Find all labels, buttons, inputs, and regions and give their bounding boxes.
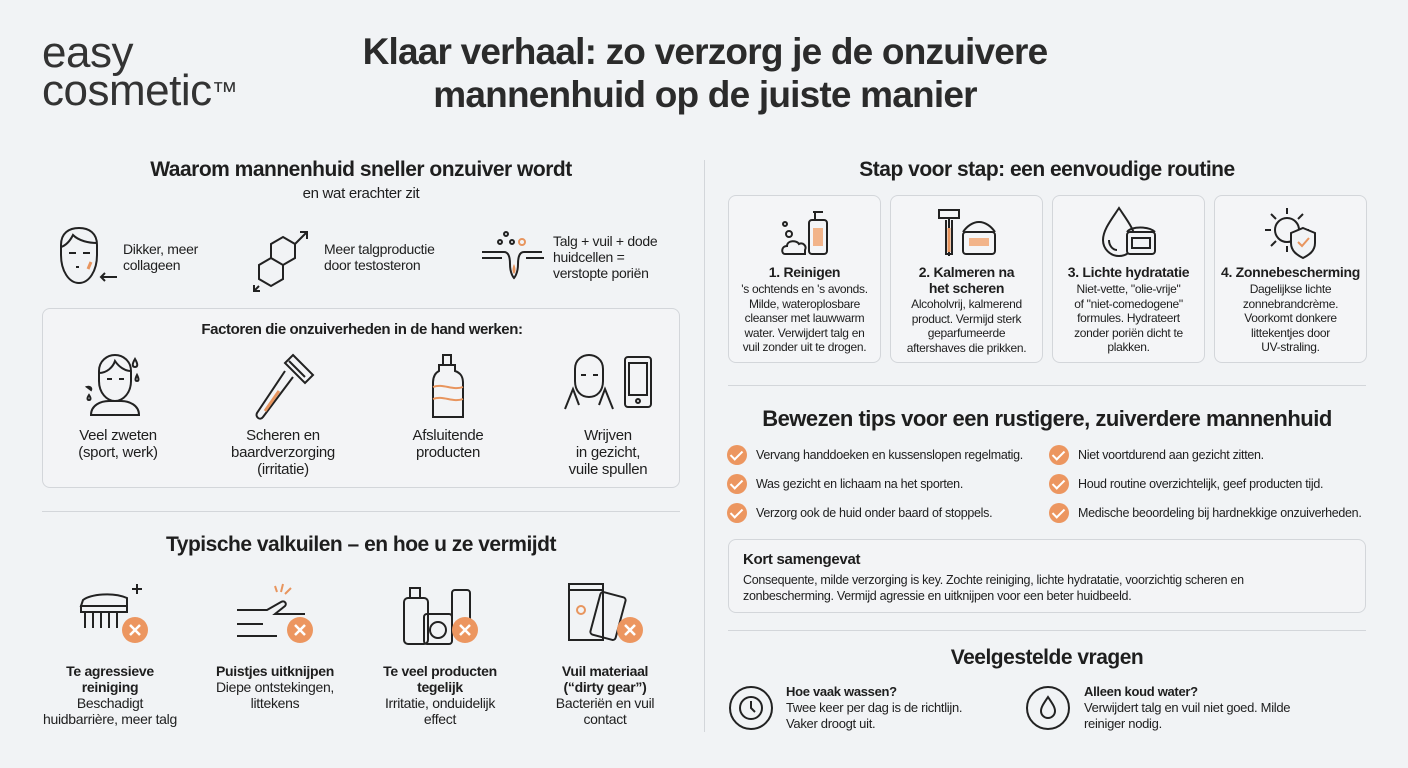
- pitfall: uitknijpen: littekens: [251, 695, 299, 711]
- logo: cosmetic™: [42, 66, 237, 115]
- title: mannenhuid op de juiste manier: [433, 74, 977, 115]
- pitfall: uitknijpen: [216, 584, 334, 711]
- faq: wassen: Hoe vaak wassen?: [786, 684, 897, 699]
- card: reinigen: vuil zonder uit te drogen.: [743, 340, 866, 354]
- factor: wrijven: in gezicht,: [576, 444, 640, 461]
- card: hydratatie: plakken.: [1107, 340, 1150, 354]
- text: dikker: Dikker, meer: [123, 241, 198, 257]
- card: zon: zonnebrandcrème.: [1243, 296, 1338, 310]
- card: kalmeren: het scheren: [929, 280, 1004, 296]
- tips list: Was gezicht en lichaam na het sporten.: [756, 477, 963, 491]
- text: talg: door testosteron: [324, 257, 420, 273]
- card: hydratatie: [1052, 195, 1205, 363]
- heading: waarom: Waarom mannenhuid sneller onzuiver wordt: [150, 158, 572, 181]
- tips list: Verzorg ook de huid onder baard of stoppels.: [756, 506, 992, 520]
- pitfall: producten: Irritatie, onduidelijk: [385, 695, 495, 711]
- card: reinigen: [728, 195, 881, 363]
- factor: zweten: (sport, werk): [78, 444, 158, 461]
- text: verstopt: huidcellen =: [553, 249, 625, 265]
- icon: face: [60, 227, 117, 284]
- card: reinigen: 1. Reinigen: [769, 264, 840, 280]
- pitfall: producten: effect: [424, 711, 456, 727]
- heading: factoren: Factoren die onzuiverheden in de hand werken:: [201, 321, 523, 338]
- card: kalmeren: Alcoholvrij, kalmerend: [911, 297, 1022, 311]
- factor: producten: [412, 354, 484, 461]
- logo: [42, 28, 237, 115]
- text: verstopt: [553, 233, 658, 281]
- card: hydratatie: Niet-vette, "olie-vrije": [1076, 282, 1181, 296]
- heading: tips: Bewezen tips voor een rustigere, zuiverdere mannenhuid: [762, 406, 1332, 431]
- faq: koud water: reiniger nodig.: [1084, 716, 1162, 731]
- card: zon: Dagelijkse lichte: [1250, 282, 1331, 296]
- card: reinigen: 's ochtends en 's avonds.: [741, 282, 868, 296]
- pitfall: vuil materiaal: Bacteriën en vuil: [556, 695, 654, 711]
- pitfall: producten: [383, 587, 497, 727]
- card: kalmeren: 2. Kalmeren na: [919, 264, 1014, 280]
- text: verstopt: Talg + vuil + dode: [553, 233, 657, 249]
- card: zon: [1214, 195, 1367, 363]
- title: Klaar verhaal: zo verzorg je de onzuivere: [363, 31, 1047, 72]
- subtitle: en wat erachter zit: [303, 185, 419, 202]
- tips list: Niet voortdurend aan gezicht zitten.: [1078, 448, 1264, 462]
- card: zon: Voorkomt donkere: [1244, 311, 1337, 325]
- pitfall: reiniging: huidbarrière, meer talg: [43, 711, 177, 727]
- card: reinigen: cleanser met lauwwarm: [745, 311, 864, 325]
- icon: pore: [482, 231, 544, 280]
- pitfall: reiniging: Beschadigt: [77, 695, 143, 711]
- text: dikker: collageen: [123, 257, 180, 273]
- faq: koud water: Verwijdert talg en vuil niet goed. Milde: [1084, 700, 1290, 715]
- factor: wrijven: Wrijven: [584, 427, 632, 444]
- card: kalmeren: product. Vermijd sterk: [912, 312, 1021, 326]
- card: reinigen: water. Verwijdert talg en: [745, 326, 864, 340]
- tips list: [727, 445, 1362, 523]
- faq: wassen: Twee keer per dag is de richtlijn.: [786, 700, 962, 715]
- card: kalmeren: geparfumeerde: [928, 326, 1005, 340]
- factor: producten: producten: [416, 444, 480, 461]
- logo: easy: [42, 28, 133, 77]
- factor: wrijven: vuile spullen: [569, 461, 647, 478]
- text: talg: Meer talgproductie: [324, 241, 435, 257]
- pitfall: uitknijpen: Puistjes uitknijpen: [216, 663, 334, 679]
- text: dikker: [123, 241, 198, 273]
- icon: molecule: [253, 231, 308, 292]
- faq: wassen: [729, 684, 962, 731]
- card: hydratatie: zonder poriën dicht te: [1074, 326, 1183, 340]
- factor: scheren: Scheren en: [246, 427, 320, 444]
- tips list: Medische beoordeling bij hardnekkige onzuiverheden.: [1078, 506, 1362, 520]
- pitfall: vuil materiaal: [556, 583, 654, 727]
- panel: waarom: [60, 158, 658, 292]
- card: reinigen: Milde, wateroplosbare: [749, 296, 860, 310]
- pitfall: vuil materiaal: Vuil materiaal: [562, 663, 648, 679]
- factor: zweten: [78, 354, 158, 461]
- pitfall: reiniging: Te agressieve: [66, 663, 154, 679]
- factor: wrijven: [564, 354, 652, 478]
- heading: valkuilen: Typische valkuilen – en hoe u ze vermijdt: [166, 533, 556, 556]
- summary box: Kort samengevat: [743, 551, 860, 568]
- pitfall: producten: tegelijk: [417, 679, 463, 695]
- factor: zweten: Veel zweten: [79, 427, 157, 444]
- pitfall: reiniging: [43, 584, 177, 727]
- card: zon: littekentjes door: [1251, 326, 1330, 340]
- pitfall: reiniging: reiniging: [82, 679, 138, 695]
- card: hydratatie: 3. Lichte hydratatie: [1068, 264, 1189, 280]
- card: zon: 4. Zonnebescherming: [1221, 264, 1360, 280]
- text: talg: [324, 241, 435, 273]
- summary box: [728, 539, 1366, 613]
- heading: stap voor stap: Stap voor stap: een eenvoudige routine: [859, 158, 1235, 181]
- tips list: Vervang handdoeken en kussenslopen regelmatig.: [756, 448, 1023, 462]
- text: verstopt: verstopte poriën: [553, 265, 649, 281]
- heading: faq: Veelgestelde vragen: [951, 646, 1143, 669]
- faq: koud water: [1026, 684, 1290, 731]
- factor: scheren: baardverzorging: [231, 444, 335, 461]
- factor: scheren: [231, 354, 335, 478]
- panel: factoren: [42, 308, 680, 488]
- factor: scheren: (irritatie): [257, 461, 309, 478]
- faq: koud water: Alleen koud water?: [1084, 684, 1198, 699]
- pitfall: vuil materiaal: (“dirty gear”): [564, 679, 646, 695]
- card: kalmeren: aftershaves die prikken.: [907, 340, 1026, 354]
- summary box: Consequente, milde verzorging is key. Zochte reiniging, lichte hydratatie, voorzichtig scheren en zonbescherming. Vermijd agressie en uitknijpen voor een beter huidbeeld.: [743, 573, 1244, 603]
- card: hydratatie: of "niet-comedogene": [1074, 296, 1183, 310]
- card: kalmeren: [890, 195, 1043, 363]
- pitfall: vuil materiaal: contact: [583, 711, 627, 727]
- pitfall: uitknijpen: Diepe ontstekingen,: [216, 679, 334, 695]
- card: zon: UV-straling.: [1261, 340, 1320, 354]
- panel: valkuilen: [43, 533, 654, 727]
- title: [363, 31, 1047, 115]
- tips list: Houd routine overzichtelijk, geef producten tijd.: [1078, 477, 1323, 491]
- card: hydratatie: formules. Hydrateert: [1077, 311, 1180, 325]
- pitfall: producten: Te veel producten: [383, 663, 497, 679]
- faq: wassen: Vaker droogt uit.: [786, 716, 875, 731]
- factor: producten: Afsluitende: [413, 427, 483, 444]
